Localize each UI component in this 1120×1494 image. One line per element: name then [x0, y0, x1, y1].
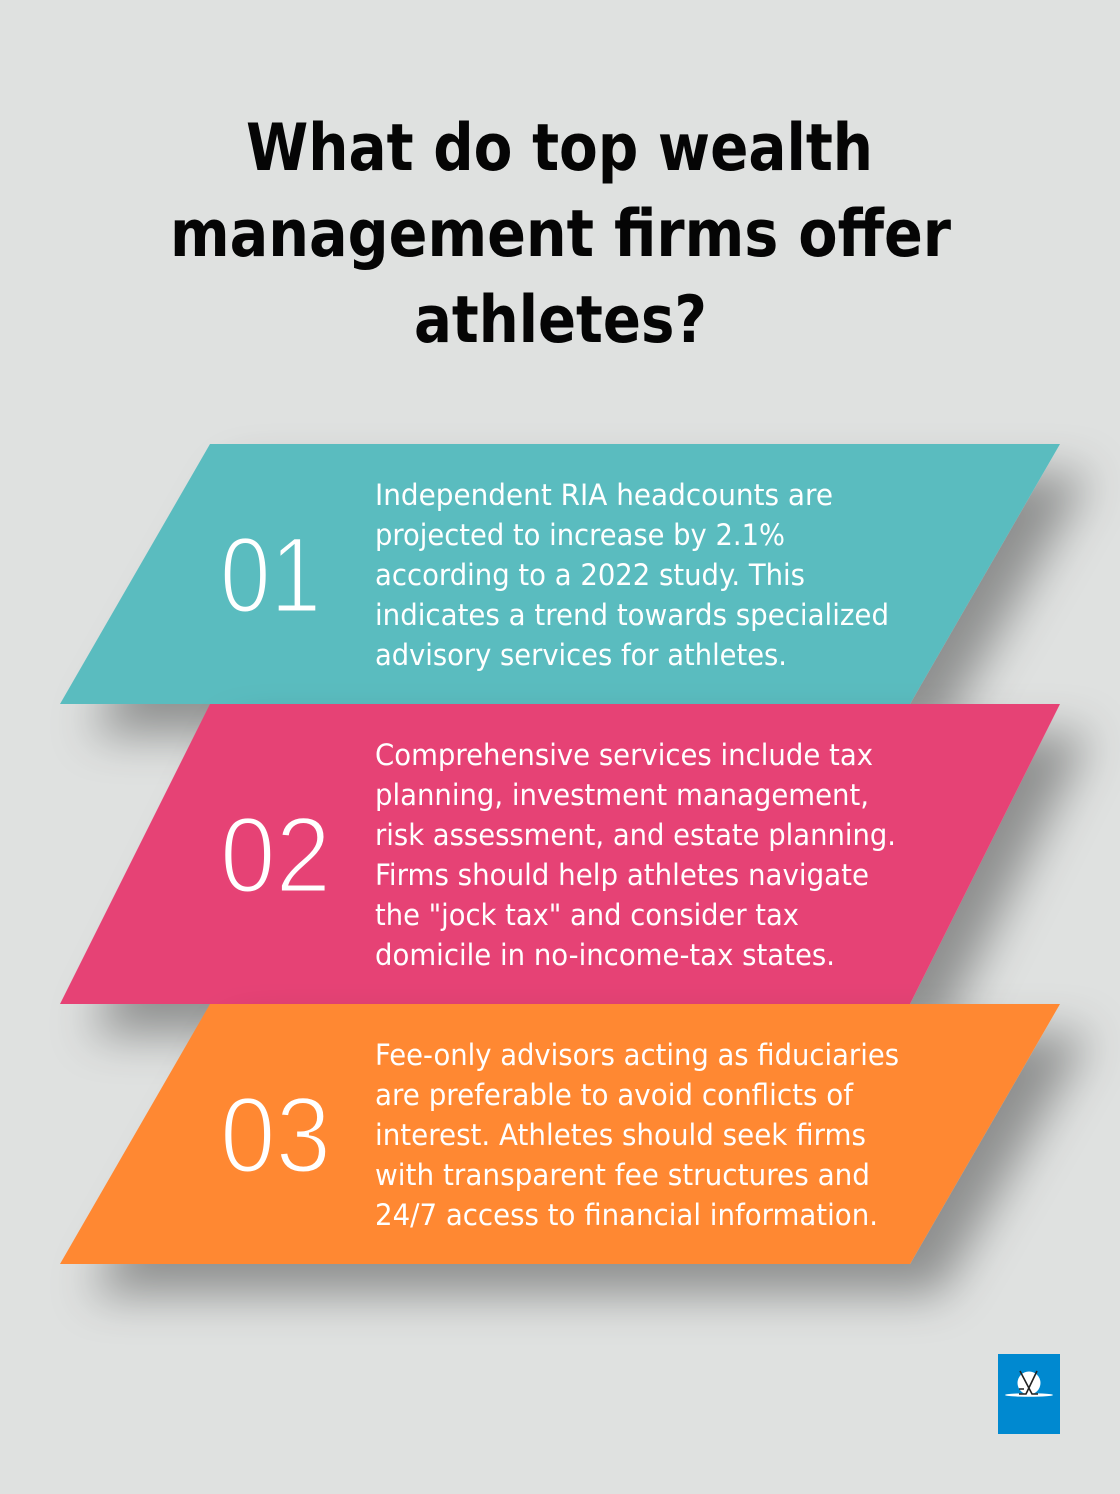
text: step 01 body: advisory services for athletes.: [375, 638, 787, 672]
text: step 03 body: interest. Athletes should seek firms: [375, 1118, 866, 1152]
text: step 01 body: [375, 478, 889, 672]
panel: step 01: [60, 444, 1060, 704]
panel: step 03: [60, 1004, 1060, 1264]
icon: hockey sticks logo: [998, 1354, 1060, 1434]
text: step 02 body: Firms should help athletes navigate: [375, 858, 869, 892]
text: step 02 body: planning, investment management,: [375, 778, 869, 812]
text: step 02 body: the "jock tax" and consider tax: [375, 898, 799, 932]
title: What do top wealth: [246, 111, 873, 186]
number 01: 01: [220, 514, 321, 635]
text: step 01 body: according to a 2022 study. This: [375, 558, 805, 592]
number 03: 03: [220, 1074, 331, 1195]
title: athletes?: [414, 283, 707, 358]
text: step 02 body: Comprehensive services include tax: [375, 738, 873, 772]
text: step 02 body: domicile in no-income-tax states.: [375, 938, 835, 972]
text: step 03 body: [375, 1038, 899, 1232]
title: management firms offer: [170, 197, 951, 272]
text: step 01 body: Independent RIA headcounts are: [375, 478, 833, 512]
text: step 01 body: projected to increase by 2.1%: [375, 518, 785, 552]
number 02: 02: [220, 794, 331, 915]
text: step 03 body: are preferable to avoid conflicts of: [375, 1078, 854, 1112]
text: step 03 body: Fee-only advisors acting as fiduciaries: [375, 1038, 899, 1072]
text: step 02 body: [375, 738, 896, 972]
text: step 02 body: risk assessment, and estate planning.: [375, 818, 896, 852]
text: step 03 body: 24/7 access to financial information.: [375, 1198, 878, 1232]
text: step 03 body: with transparent fee structures and: [375, 1158, 870, 1192]
text: step 01 body: indicates a trend towards specialized: [375, 598, 889, 632]
title: [170, 111, 951, 358]
panel: step 02: [60, 704, 1060, 1004]
